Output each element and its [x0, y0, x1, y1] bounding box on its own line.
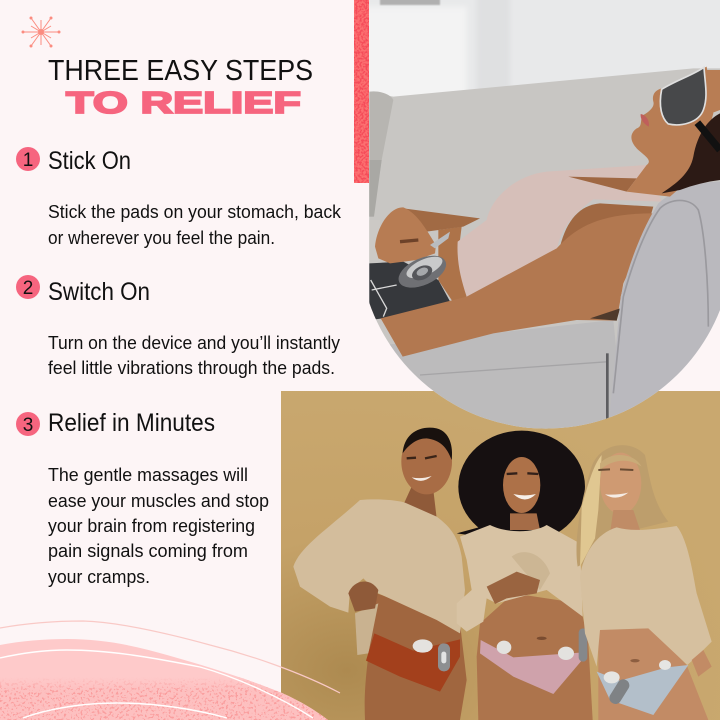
step 1 description — [48, 201, 342, 248]
step 3 description: your brain from registering — [48, 515, 255, 536]
step 3 description — [48, 464, 269, 587]
woman 1 — [293, 428, 467, 720]
woman 2 — [457, 431, 593, 720]
step 2 description: Turn on the device and you’ll instantly — [48, 332, 341, 353]
step 2 number badge — [16, 275, 40, 299]
crop top — [457, 165, 662, 297]
step 2 description: feel little vibrations through the pads. — [48, 357, 335, 378]
step 1 number badge: 1 — [23, 150, 33, 171]
step 3 description: The gentle massages will — [48, 464, 248, 485]
step 1 — [16, 147, 342, 248]
step 2 description — [48, 332, 341, 378]
step 1 description: or wherever you feel the pain. — [48, 227, 275, 248]
sleep mask — [660, 67, 706, 125]
neck and face — [627, 67, 713, 197]
step 3 heading: Relief in Minutes — [48, 409, 215, 437]
icon: starburst — [22, 16, 60, 48]
step 1 description: Stick the pads on your stomach, back — [48, 201, 342, 222]
step 3 description: ease your muscles and stop — [48, 490, 269, 511]
photo: three women wearing the device — [281, 391, 720, 720]
hair — [662, 113, 720, 193]
forearm behind — [403, 208, 480, 232]
shorts and device — [369, 262, 451, 320]
title: THREE EASY STEPS — [48, 55, 313, 87]
title — [48, 55, 313, 120]
midriff — [438, 227, 467, 303]
device — [398, 256, 446, 288]
step 2 — [16, 275, 341, 378]
step 3 description: your cramps. — [48, 566, 150, 587]
photo: woman resting on sofa with device — [363, 0, 720, 433]
decorative red speckled stripe — [354, 0, 369, 183]
arm — [381, 213, 653, 357]
step 2 number badge: 2 — [23, 278, 33, 299]
sofa back — [369, 68, 720, 347]
step 1 number badge — [16, 147, 40, 171]
step 3 description: pain signals coming from — [48, 540, 248, 561]
step 3 number badge — [16, 412, 40, 436]
title: TO RELIEF — [66, 85, 301, 120]
hand — [375, 207, 436, 263]
armrest — [608, 182, 720, 433]
decorative pink waves — [0, 621, 340, 720]
step 1 heading: Stick On — [48, 147, 131, 175]
seat cushion — [369, 320, 617, 430]
step 3 — [16, 409, 269, 587]
step 3 number badge: 3 — [23, 415, 33, 436]
woman 3 — [576, 445, 712, 720]
step 2 heading: Switch On — [48, 278, 150, 306]
